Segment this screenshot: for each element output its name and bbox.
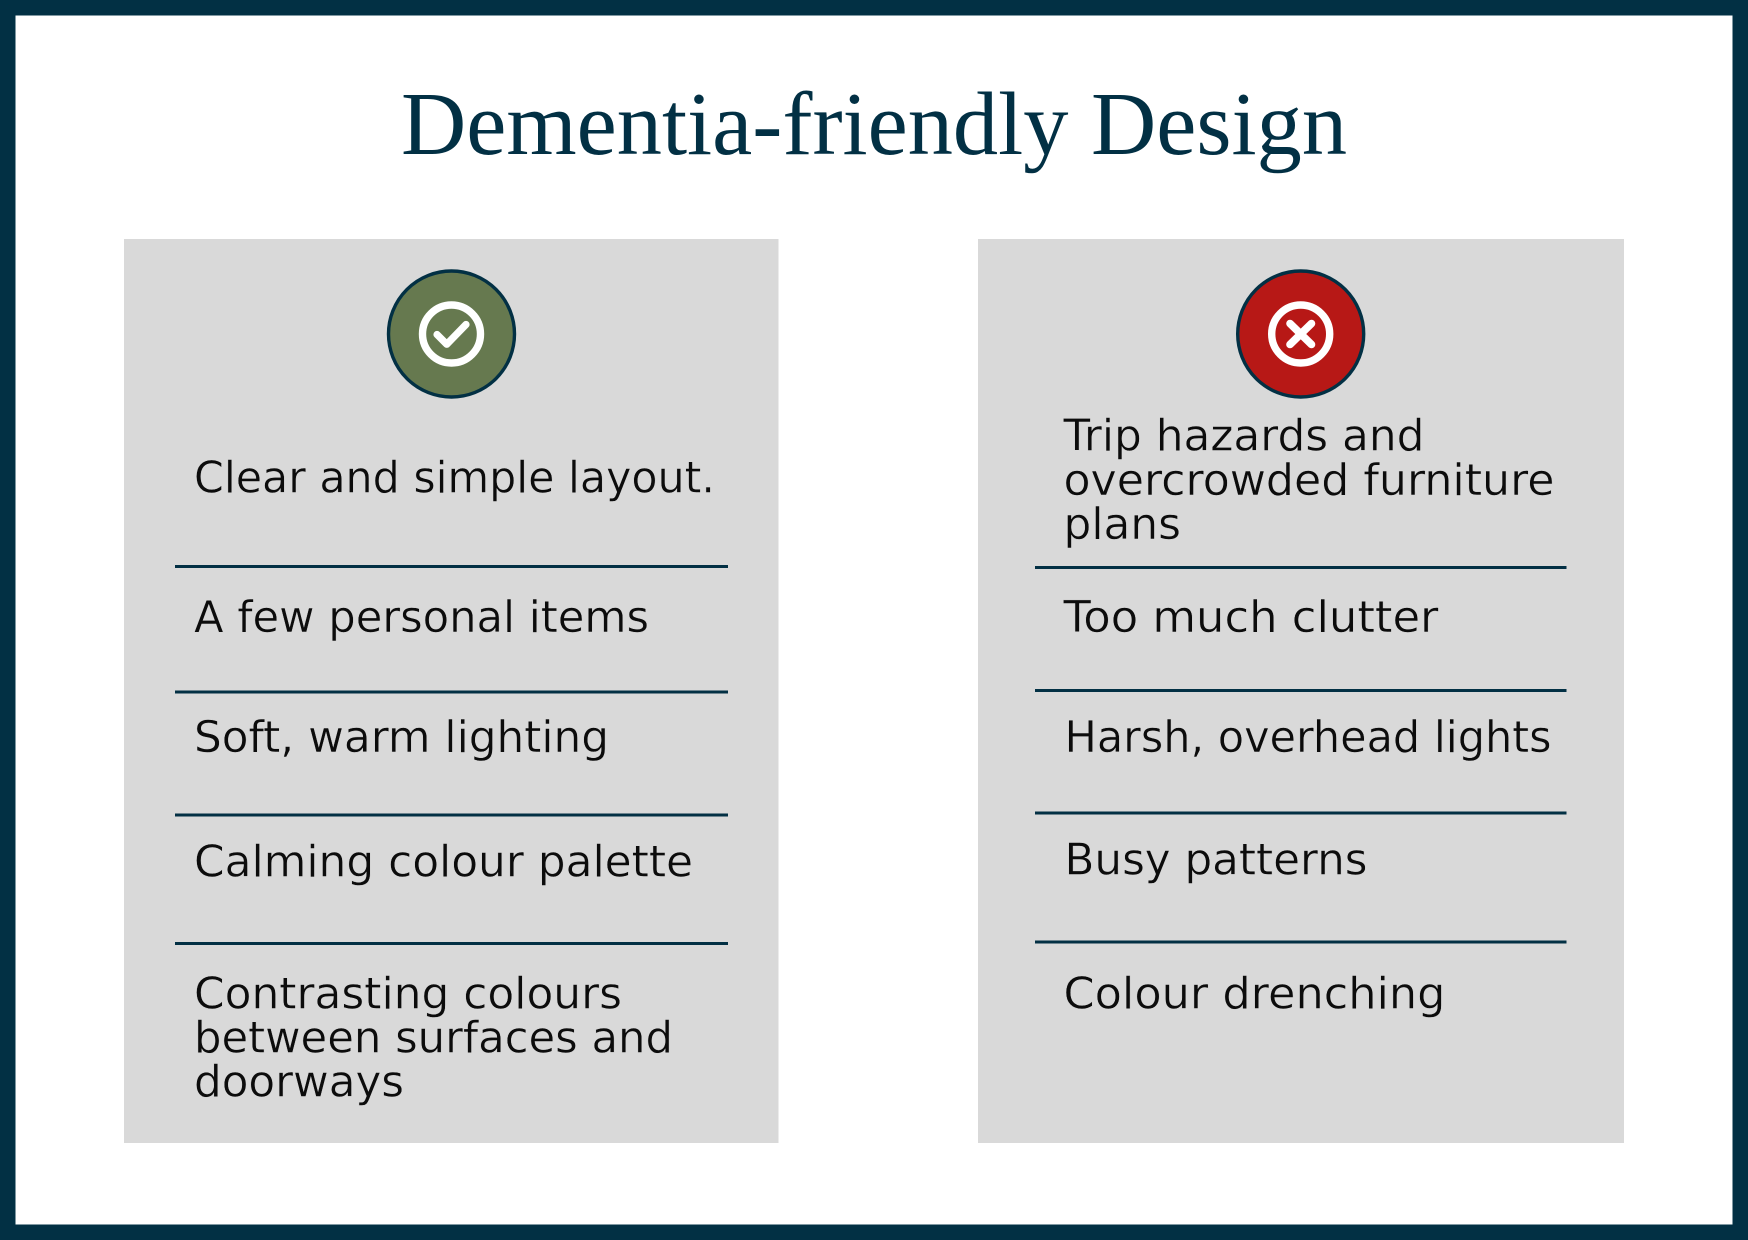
item: personal items: A few personal items — [194, 592, 649, 643]
item: harsh lights: Harsh, overhead lights — [1064, 712, 1552, 763]
item: contrasting colours: Contrasting colours — [194, 968, 622, 1020]
panel: do: doorways — [194, 1056, 404, 1108]
item: clear layout: Clear and simple layout. — [194, 452, 715, 504]
panel: do — [124, 239, 778, 1143]
item: trip hazards: Trip hazards and — [1063, 410, 1424, 462]
icon: check mark — [388, 271, 514, 397]
item: colour palette: Calming colour palette — [194, 836, 693, 888]
panel: don't: overcrowded furniture — [1064, 455, 1554, 506]
item: clutter: Too much clutter — [1062, 592, 1439, 643]
title: Dementia-friendly Design — [401, 75, 1347, 174]
item: lighting: Soft, warm lighting — [194, 712, 609, 763]
item: colour drenching: Colour drenching — [1064, 968, 1446, 1020]
panel: don't — [978, 239, 1624, 1143]
panel: don't: plans — [1064, 499, 1181, 550]
icon: cross mark — [1238, 271, 1364, 397]
panel: do: between surfaces and — [194, 1012, 673, 1064]
item: busy patterns: Busy patterns — [1064, 834, 1368, 886]
